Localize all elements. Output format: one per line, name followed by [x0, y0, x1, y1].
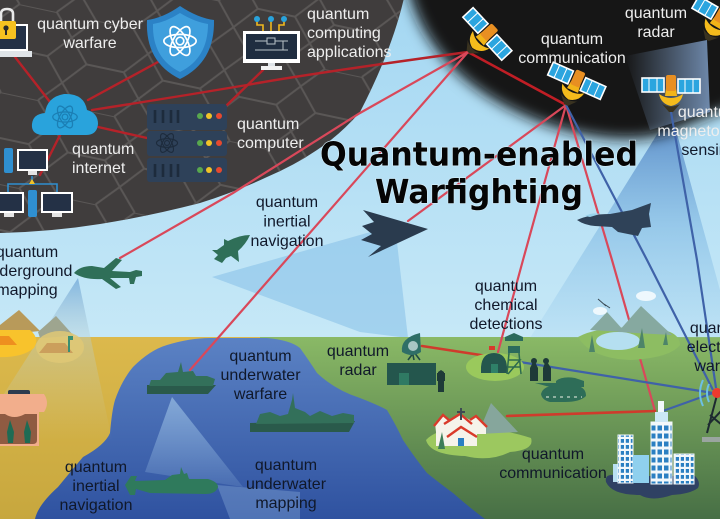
clouds and birds: [593, 291, 656, 315]
red network links: [15, 52, 655, 416]
satellite 3: [642, 75, 700, 112]
sensor beam: stealth bomber: [212, 225, 408, 338]
label: quantum radar (ground): radar: [339, 362, 377, 379]
desert mountains and oasis: [0, 310, 84, 363]
sky background: [0, 0, 720, 338]
drone: [74, 258, 142, 289]
icon: computer network: [0, 148, 73, 217]
drone sensor beam: [0, 278, 112, 440]
icon: quantum server: [147, 104, 227, 182]
label: quantum cyber warfare: quantum cyber: [37, 16, 143, 33]
quantum radar beam in space: [625, 40, 710, 130]
label: quantum radar (space): radar: [637, 24, 675, 41]
black space region: [406, 0, 720, 139]
dark cyber panel: [0, 0, 404, 233]
icon: quantum shield: [147, 6, 214, 79]
label: quantum inertial navigation (missile): quantum: [256, 194, 318, 211]
icon: quantum computing monitor: [243, 16, 300, 70]
label: quantum computing applications: computing: [307, 25, 381, 42]
patrol boat: [147, 362, 216, 394]
village: [426, 403, 532, 458]
submarine: [125, 467, 218, 495]
label: quantum inertial navigation (submarine): navigation: [60, 497, 132, 514]
radio tower: [700, 380, 720, 442]
green land ground: [260, 337, 720, 519]
label: quantum radar (ground): quantum: [327, 343, 389, 360]
blue network links: [520, 105, 716, 412]
command tent and watchtower: [466, 333, 524, 381]
sensor beam: fighter jet magnetometer cone: [530, 112, 720, 338]
label: quantum computer: computer: [237, 135, 304, 152]
city skyline: [606, 401, 699, 498]
label: quantum inertial navigation (missile): inertial: [263, 214, 311, 230]
icon: laptop with padlock: [0, 9, 32, 57]
stealth bomber: [361, 210, 428, 257]
label: quantum computing applications: applications: [307, 44, 392, 61]
label: quantum internet: quantum: [72, 141, 134, 158]
title: Quantum-enabled: [320, 134, 638, 174]
sand desert ground: [0, 337, 260, 519]
label: quantum radar (space): quantum: [625, 5, 687, 22]
label: quantum communication (ground): quantum: [522, 446, 584, 463]
label: quantum computing applications: quantum: [307, 6, 369, 23]
ship sonar beam: [145, 397, 243, 487]
label: quantum communication (space): communication: [518, 50, 626, 67]
fighter jet: [577, 203, 651, 236]
underground missile bunker: [0, 390, 47, 446]
label: quantum underwater mapping: mapping: [255, 495, 317, 512]
soldiers: [530, 358, 551, 381]
label: quantum underwater warfare: underwater: [220, 367, 301, 384]
missile: [212, 235, 250, 263]
label: quantum internet: internet: [72, 160, 126, 177]
label: quantum chemical detections: quantum: [475, 278, 537, 295]
satellite 2: [540, 59, 608, 117]
label: quantum inertial navigation (submarine): quantum: [65, 459, 127, 476]
radar station: [387, 333, 445, 392]
label: quantum inertial navigation (submarine): inertial: [72, 478, 120, 495]
title: Warfighting: [375, 172, 583, 211]
label: quantum underwater mapping: underwater: [246, 476, 327, 493]
satellite 4: [682, 0, 720, 54]
label: quantum cyber warfare: warfare: [62, 35, 117, 52]
tank: [535, 377, 586, 402]
submarine sonar beam: [217, 485, 300, 519]
label: quantum underwater warfare: warfare: [233, 386, 287, 403]
label: quantum chemical detections: chemical: [474, 297, 538, 314]
sea: [35, 338, 485, 519]
lake and mountains: [578, 306, 680, 360]
label: quantum computer: quantum: [237, 116, 299, 133]
label: quantum communication (ground): communication: [499, 465, 607, 482]
label: quantum chemical detections: detections: [470, 316, 542, 333]
label: quantum inertial navigation (missile): navigation: [251, 233, 323, 250]
satellite 1: [448, 6, 515, 73]
title: [320, 134, 638, 211]
label: quantum underwater warfare: quantum: [229, 348, 292, 365]
label: quantum communication (space): quantum: [541, 31, 603, 48]
label: quantum underwater mapping: quantum: [255, 457, 317, 474]
icon: quantum cloud: [32, 94, 98, 135]
warship: [250, 393, 355, 432]
